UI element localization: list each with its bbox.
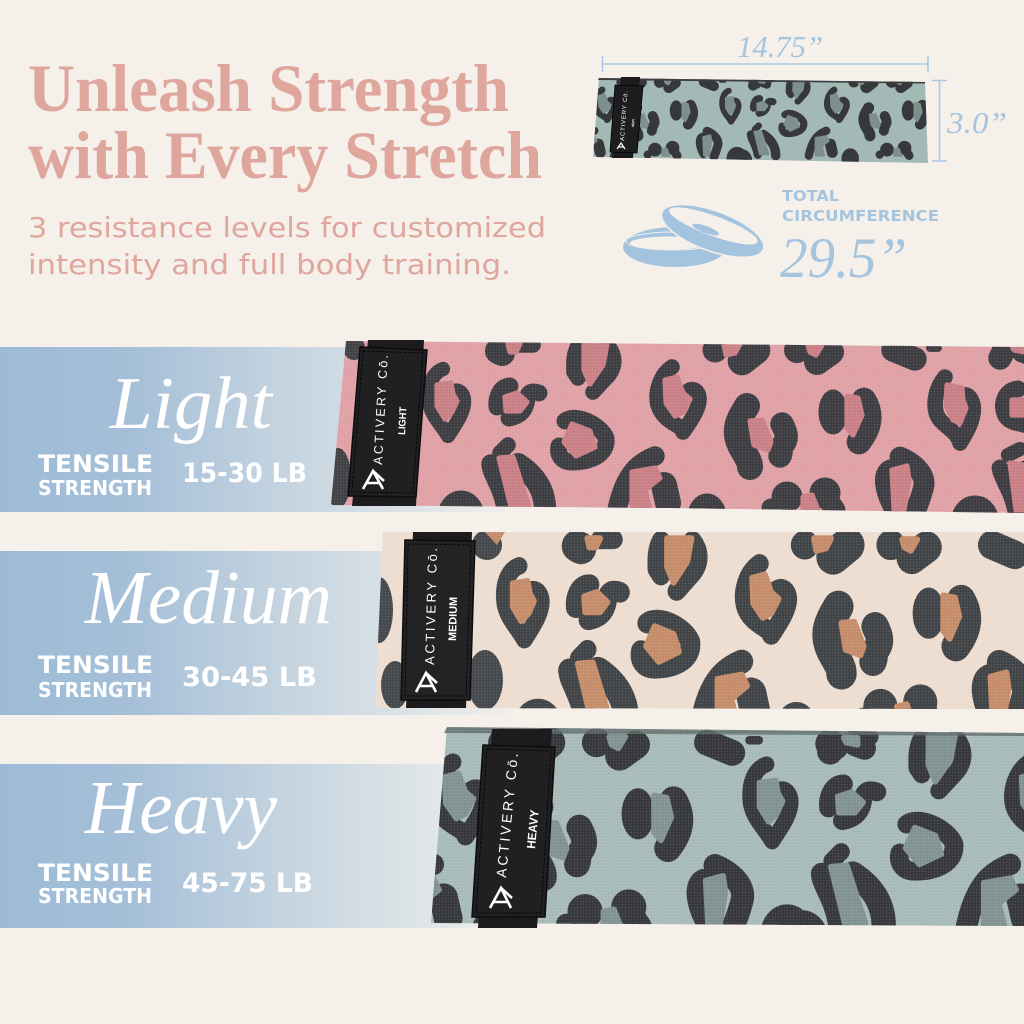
width dimension xyxy=(602,29,928,72)
logo mark xyxy=(416,673,437,692)
strip: medium: 30-45 LB xyxy=(182,662,317,693)
medium resistance band: ACTIVERY Cō. xyxy=(422,548,440,665)
strip: light: TENSILE xyxy=(38,450,153,478)
circumference value: 29.5” xyxy=(780,227,907,290)
strip: heavy: TENSILE xyxy=(38,859,153,887)
heavy resistance band: ACTIVERY Cō. xyxy=(493,752,521,878)
icon: two resistance band rings xyxy=(623,194,770,268)
logo mark xyxy=(490,888,512,908)
subtitle: 3 resistance levels for customized xyxy=(28,211,546,244)
medium resistance band: MEDIUM xyxy=(447,597,460,641)
strip: medium xyxy=(0,551,520,715)
strip: medium: TENSILE xyxy=(38,651,153,679)
light resistance band: ACTIVERY Cō. xyxy=(371,355,391,465)
title xyxy=(28,50,542,193)
strip: heavy: Heavy xyxy=(84,766,277,850)
light resistance band: LIGHT xyxy=(397,407,409,435)
strip: heavy: 45-75 LB xyxy=(182,868,313,899)
strip: light: 15-30 LB xyxy=(182,458,307,489)
height dimension xyxy=(932,80,1007,161)
title: with Every Stretch xyxy=(28,117,542,193)
subtitle: intensity and full body training. xyxy=(28,248,511,281)
total circumference label xyxy=(782,187,939,225)
strip: heavy xyxy=(0,764,520,928)
strip: light xyxy=(0,347,520,512)
strip: heavy: STRENGTH xyxy=(38,884,152,908)
small heavy band photo: HEAVY xyxy=(631,118,636,127)
light resistance band xyxy=(331,340,1024,513)
strip: medium: STRENGTH xyxy=(38,678,152,702)
total circumference label: TOTAL xyxy=(782,187,839,205)
strip: medium: Medium xyxy=(84,556,332,640)
subtitle xyxy=(28,211,546,281)
total circumference label: CIRCUMFERENCE xyxy=(782,207,939,225)
strip: light: STRENGTH xyxy=(38,476,152,500)
medium resistance band xyxy=(375,532,1024,709)
heavy resistance band: HEAVY xyxy=(524,809,542,849)
title: Unleash Strength xyxy=(28,50,509,126)
logo mark xyxy=(363,471,384,489)
small heavy band photo xyxy=(593,77,928,163)
small heavy band photo: ACTIVERY Cō. xyxy=(620,91,630,141)
strip: light: Light xyxy=(109,363,275,445)
width dimension: 14.75” xyxy=(737,29,823,64)
heavy resistance band xyxy=(431,727,1024,928)
height dimension: 3.0” xyxy=(946,105,1007,140)
